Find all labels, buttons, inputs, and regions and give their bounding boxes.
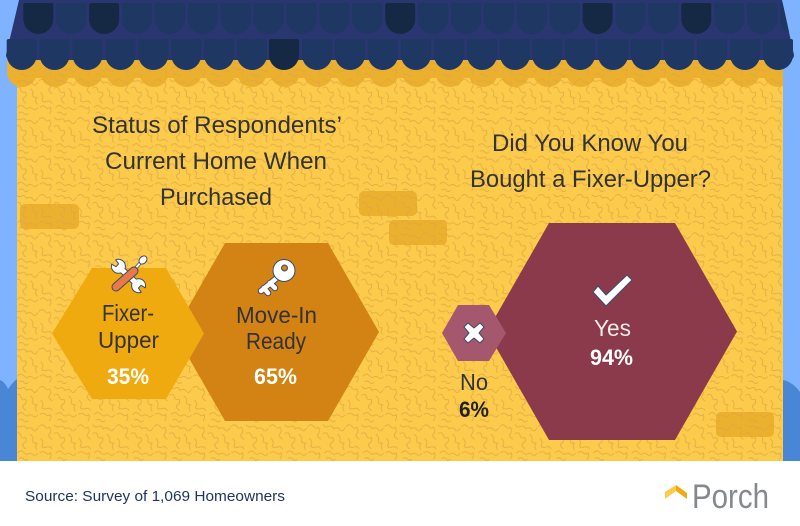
- yes value: 94%: [590, 345, 633, 370]
- top row shingles: [23, 3, 800, 34]
- brick: lower right: [716, 412, 774, 437]
- fixer label: Fixer-: [102, 300, 154, 326]
- icon: key: [261, 260, 295, 293]
- icon: check mark: [593, 275, 632, 306]
- no label: No: [460, 369, 488, 395]
- heading: status of current home: Current Home When: [105, 148, 327, 175]
- brick: centre lower: [389, 220, 447, 245]
- right hill: [783, 380, 800, 461]
- move-in label: Move-In: [236, 302, 317, 328]
- roof: [6, 0, 800, 70]
- heading: did you know: Did You Know You: [492, 130, 688, 157]
- icon: wrench and screwdriver: [111, 254, 149, 293]
- heading: did you know: [470, 130, 711, 193]
- hexagon: no: [442, 305, 506, 361]
- hexagon: fixer-upper: [52, 254, 204, 399]
- house wall: [7, 55, 783, 461]
- icon: x mark: [464, 323, 484, 343]
- hexagon: fixer-upper: Upper: [98, 327, 159, 353]
- source note: Source: Survey of 1,069 Homeowners: [25, 489, 285, 505]
- logo: Porch: [665, 478, 769, 516]
- brick: centre upper: [359, 191, 417, 216]
- brick: left: [20, 204, 79, 229]
- bottom row shingles: [7, 39, 793, 70]
- hexagon: yes: [487, 223, 737, 440]
- logo chevron: [665, 485, 687, 499]
- heading: status of current home: Purchased: [160, 184, 272, 211]
- roof shadow on wall: [7, 55, 783, 87]
- move-in value: 65%: [254, 364, 297, 389]
- no value: 6%: [459, 397, 489, 422]
- hexagon: move-in ready: Ready: [246, 328, 306, 354]
- yes label: Yes: [594, 315, 631, 341]
- heading: did you know: Bought a Fixer-Upper?: [470, 166, 711, 193]
- heading: status of current home: [92, 112, 342, 211]
- fixer value: 35%: [107, 364, 149, 389]
- heading: status of current home: Status of Respondents’: [92, 112, 342, 139]
- wall texture: [17, 55, 783, 461]
- hexagon: move-in ready: [174, 243, 379, 421]
- left hill: [0, 379, 17, 461]
- logo: Porch: Porch: [692, 478, 769, 516]
